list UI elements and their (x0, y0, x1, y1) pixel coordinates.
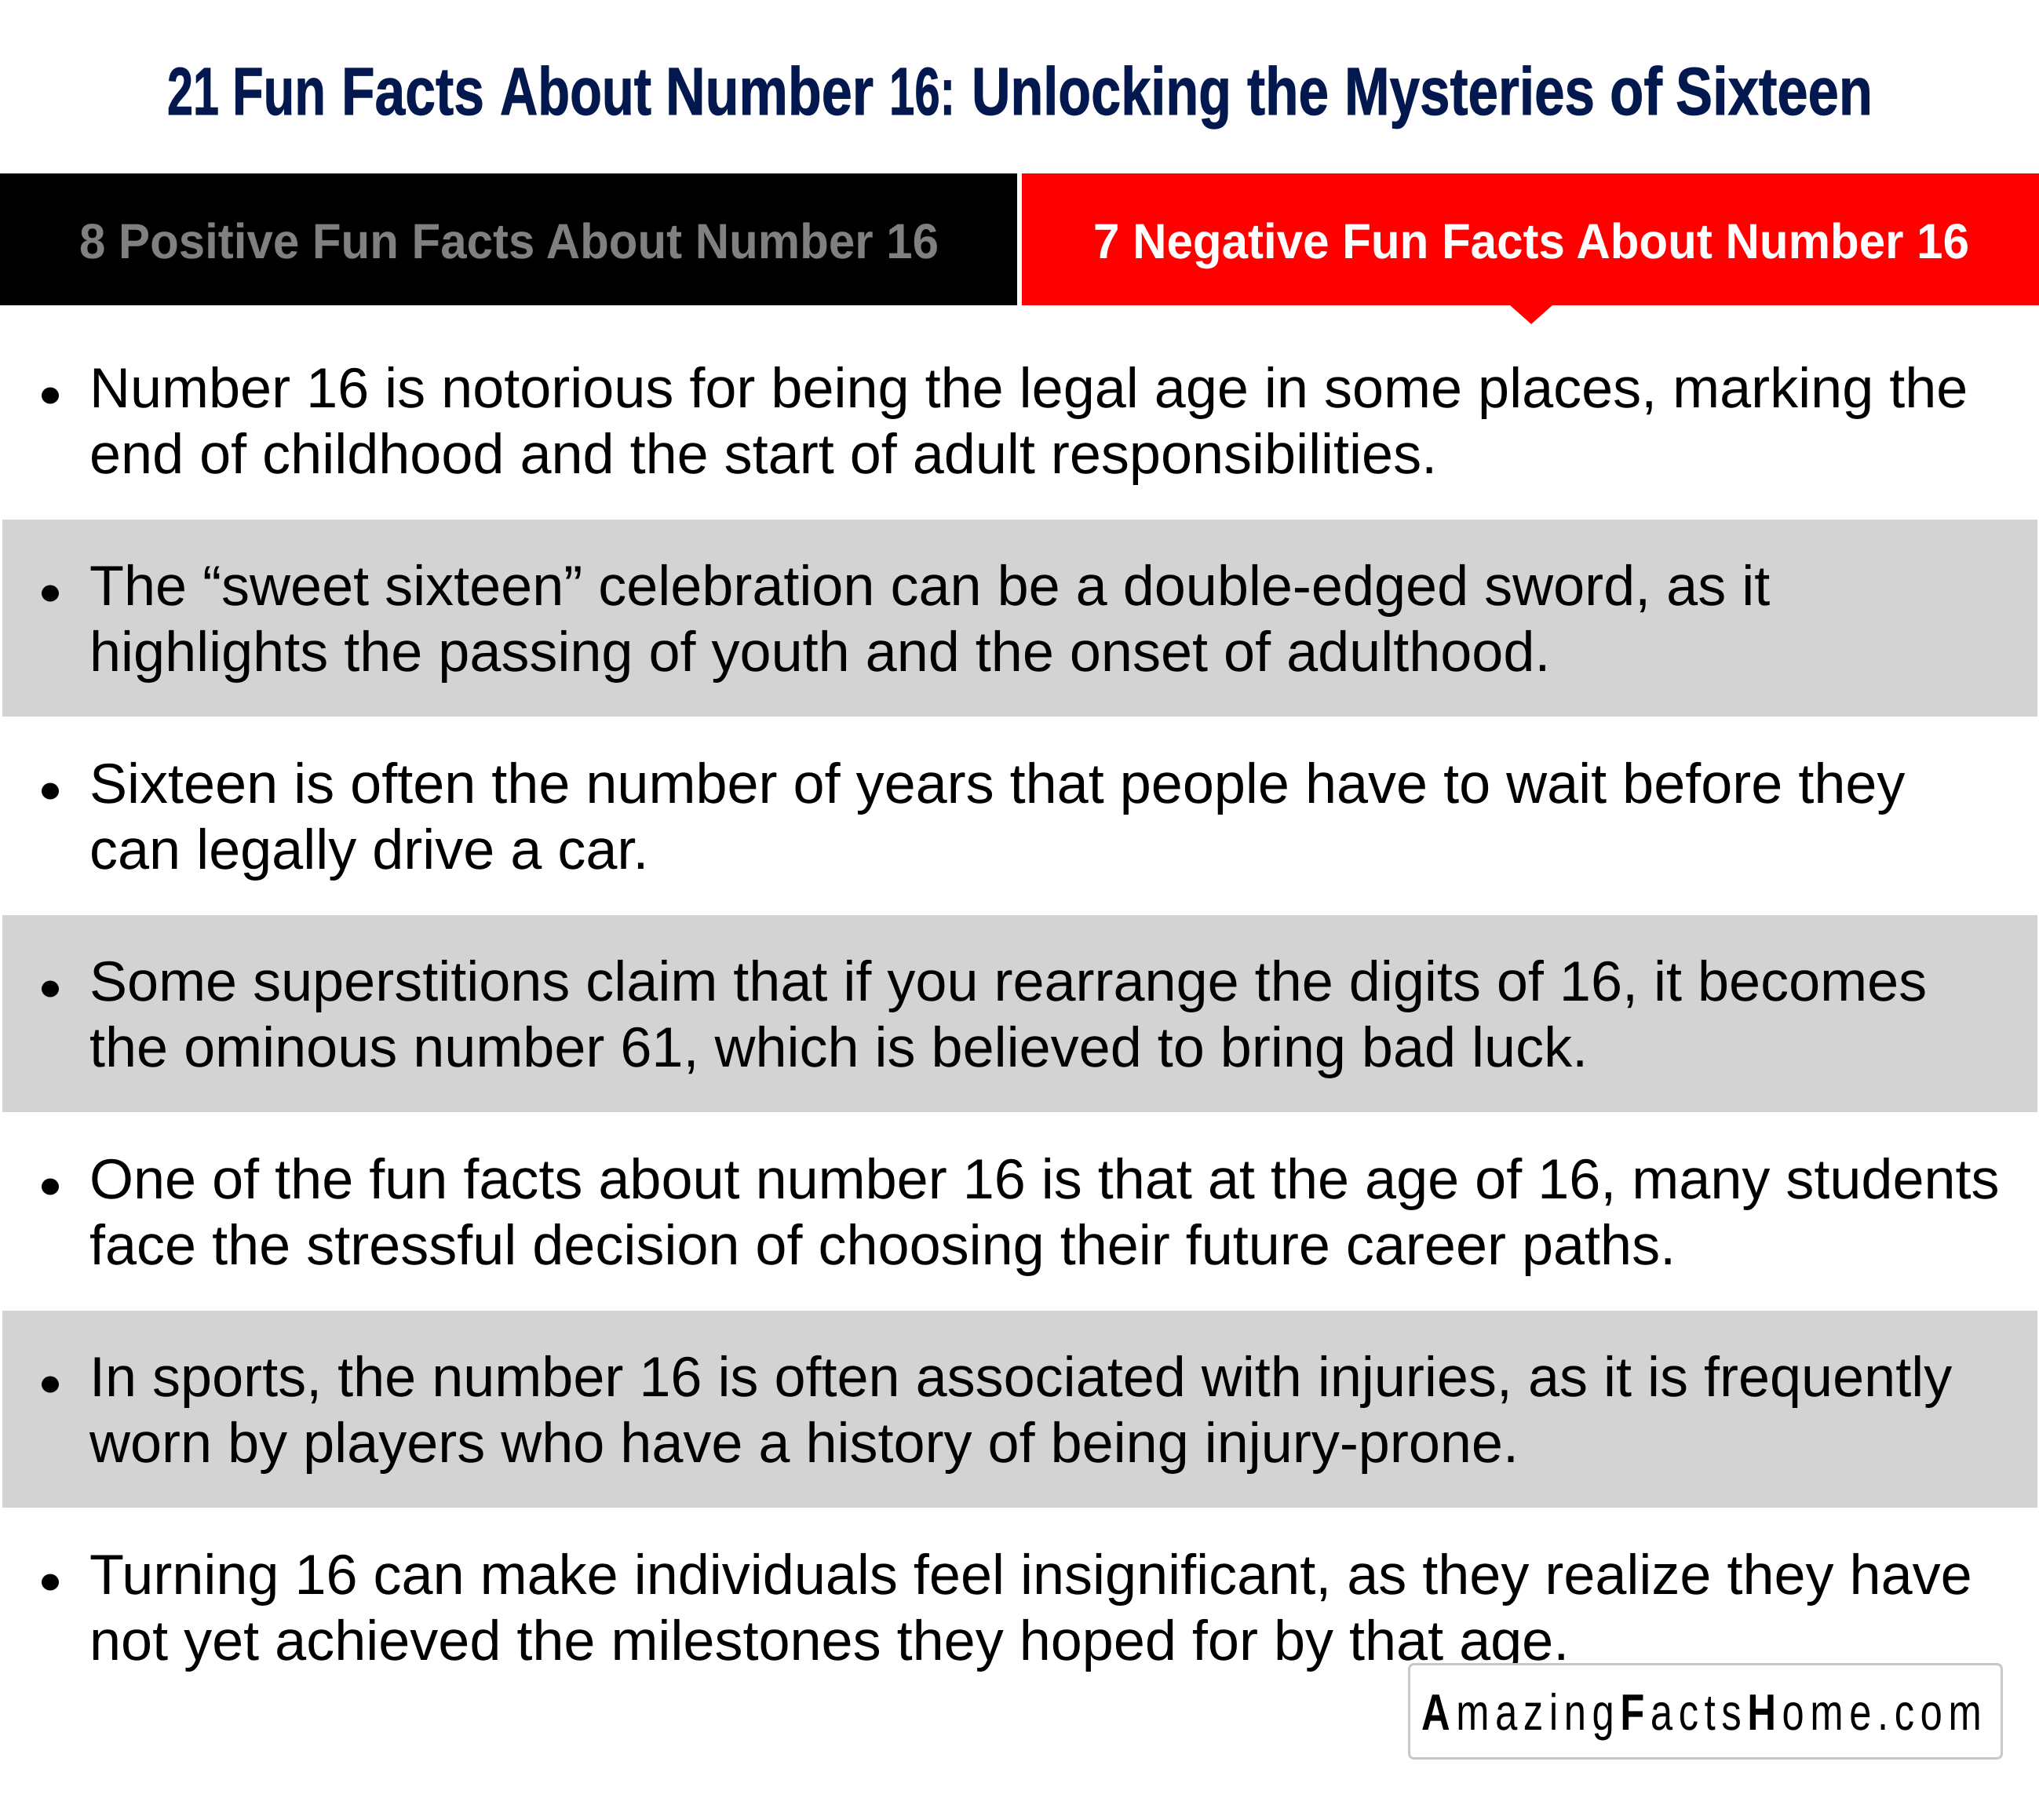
fact 4: Some superstitions claim that if you rearrange the digits of 16, it becomes (89, 950, 1927, 1013)
title: 16: (889, 54, 955, 129)
tab: negative facts: 7 Negative Fun Facts About Number 16 (1093, 214, 1969, 269)
fact 2: highlights the passing of youth and the onset of adulthood. (89, 621, 1550, 684)
fact 4: the ominous number 61, which is believed to bring bad luck. (89, 1016, 1588, 1079)
title: Sixteen (1676, 54, 1873, 129)
fact 3: can legally drive a car. (89, 819, 648, 881)
fact 6 (2, 1311, 2037, 1508)
fact 2: The “sweet sixteen” celebration can be a double-edged sword, as it (89, 555, 1770, 618)
title: Facts (341, 54, 484, 129)
fact 2 (2, 520, 2037, 717)
title: Mysteries (1344, 54, 1595, 129)
fact 7: Turning 16 can make individuals feel insignificant, as they realize they have (89, 1544, 1972, 1607)
title: the (1247, 54, 1329, 129)
title: Unlocking (972, 54, 1231, 129)
title: Number (666, 54, 874, 129)
fact 1: end of childhood and the start of adult responsibilities. (89, 423, 1437, 486)
fact 4 (2, 915, 2037, 1112)
fact 1 (42, 357, 1968, 486)
fact 6: worn by players who have a history of being injury-prone. (89, 1412, 1519, 1475)
fact 3 (42, 753, 1905, 881)
fact 5 (42, 1148, 2000, 1277)
fact 3: Sixteen is often the number of years that people have to wait before they (89, 753, 1905, 815)
watermark badge (1410, 1664, 2001, 1758)
title: Fun (232, 54, 326, 129)
tab: positive facts: 8 Positive Fun Facts About Number 16 (79, 214, 939, 269)
tab: positive facts (0, 173, 1017, 305)
fact 7 (42, 1544, 1972, 1672)
title: 21 (167, 54, 219, 129)
fact 7: not yet achieved the milestones they hoped for by that age. (89, 1610, 1569, 1672)
fact 6: In sports, the number 16 is often associated with injuries, as it is frequently (89, 1346, 1952, 1409)
title: About (500, 54, 651, 129)
title: of (1610, 54, 1662, 129)
fact 5: One of the fun facts about number 16 is that at the age of 16, many students (89, 1148, 2000, 1211)
fact 1: Number 16 is notorious for being the legal age in some places, marking the (89, 357, 1968, 420)
tab: negative facts (1022, 173, 2039, 324)
watermark badge: AmazingFactsHome.com (1421, 1683, 1982, 1741)
title (167, 54, 1873, 129)
fact 5: face the stressful decision of choosing their future career paths. (89, 1214, 1676, 1277)
